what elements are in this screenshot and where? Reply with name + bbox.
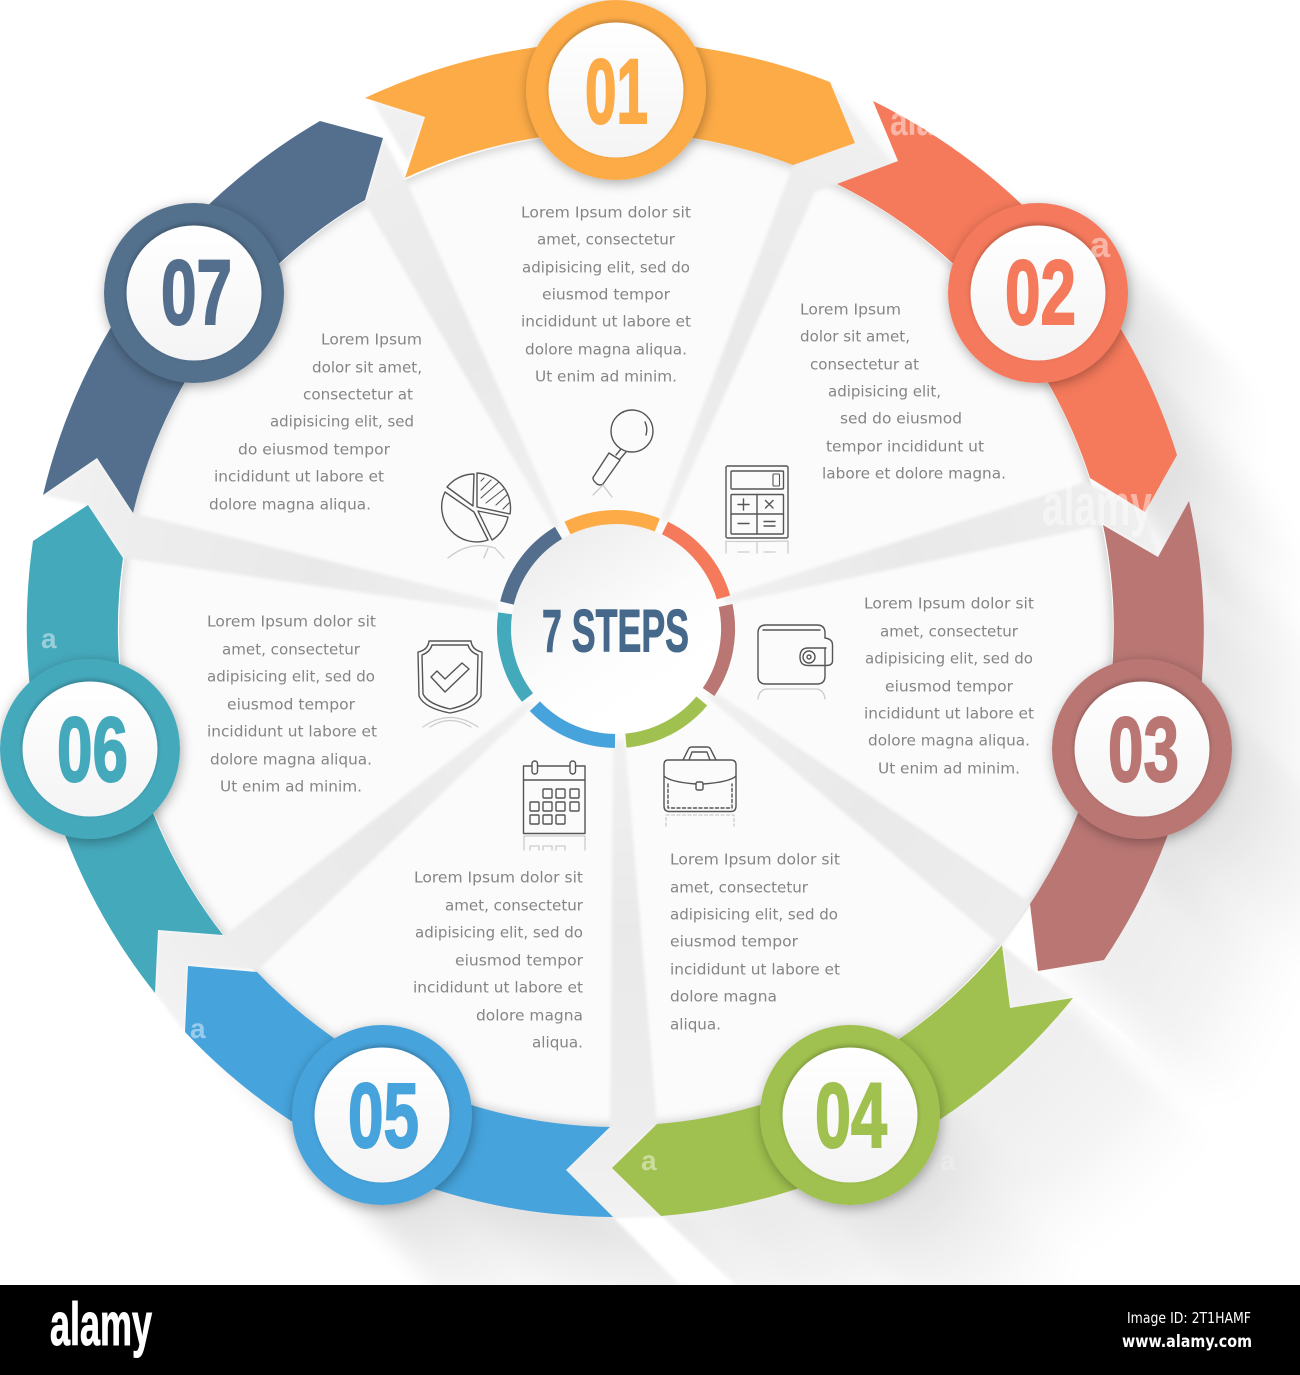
- text block 04: Lorem Ipsum dolor sit: [670, 850, 840, 868]
- badge 04: [760, 1025, 940, 1205]
- text block 06: eiusmod tempor: [227, 696, 356, 714]
- text block 07: Lorem Ipsum: [321, 330, 422, 348]
- text block 02: consectetur at: [810, 356, 919, 374]
- footer image id: Image ID: 2T1HAMF: [1127, 1309, 1251, 1327]
- badge 06: 06: [57, 699, 128, 801]
- text block 03: dolore magna aliqua.: [868, 732, 1030, 750]
- text block 01: incididunt ut labore et: [521, 312, 691, 330]
- text block 02: dolor sit amet,: [800, 328, 910, 346]
- segment 03 band: [1030, 501, 1204, 971]
- badge 06: [0, 659, 180, 839]
- badge 05: 05: [348, 1065, 419, 1167]
- text block 02: sed do eiusmod: [840, 410, 962, 428]
- badge 03: 03: [1108, 699, 1179, 801]
- inner disc: [119, 133, 1113, 1127]
- segment 02 band: [837, 101, 1177, 512]
- text block 01: Lorem Ipsum dolor sit: [521, 204, 691, 222]
- text block 04: adipisicing elit, sed do: [670, 906, 838, 924]
- stock watermark marks: a: [1090, 224, 1111, 265]
- text block 05: amet, consectetur: [445, 896, 584, 914]
- text block 03: adipisicing elit, sed do: [865, 650, 1033, 668]
- badge 02: 02: [1005, 242, 1076, 344]
- badge 07: 07: [161, 242, 232, 344]
- stock watermark marks: alamy: [1042, 473, 1152, 538]
- stock watermark marks: ala: [890, 97, 934, 144]
- badge 02: [948, 203, 1128, 383]
- text block 01: dolore magna aliqua.: [525, 340, 687, 358]
- text block 04: amet, consectetur: [670, 878, 809, 896]
- text block 07: dolore magna aliqua.: [209, 496, 371, 514]
- white stripes through the long shadow: [613, 971, 1150, 1285]
- text block 06: amet, consectetur: [222, 640, 361, 658]
- text block 05: dolore magna: [476, 1006, 583, 1024]
- text block 03: Ut enim ad minim.: [878, 760, 1020, 778]
- text block 07: incididunt ut labore et: [214, 468, 384, 486]
- text block 05: adipisicing elit, sed do: [415, 924, 583, 942]
- text block 02: tempor incididunt ut: [826, 438, 984, 456]
- center ring segments: [504, 517, 728, 741]
- text block 02: Lorem Ipsum: [800, 300, 901, 318]
- icon: calendar: [524, 761, 585, 850]
- text block 01: eiusmod tempor: [542, 286, 671, 304]
- text block 05: [413, 868, 584, 1052]
- badge 05: [292, 1025, 472, 1205]
- stock watermark marks: a: [190, 1013, 206, 1044]
- badge 07: [104, 203, 284, 383]
- text block 07: consectetur at: [303, 386, 413, 404]
- badge 01: [526, 0, 706, 180]
- text block 03: amet, consectetur: [880, 622, 1019, 640]
- center title: 7 STEPS: [542, 598, 689, 664]
- center circle: [511, 524, 721, 734]
- segment 06 band: [27, 505, 223, 993]
- text block 05: Lorem Ipsum dolor sit: [414, 868, 583, 886]
- text block 01: adipisicing elit, sed do: [522, 258, 690, 276]
- segment 01 band: [365, 42, 855, 178]
- stock watermark marks: a: [940, 1145, 956, 1176]
- badge 03: [1052, 659, 1232, 839]
- segment 07 band: [43, 121, 383, 513]
- text block 03: eiusmod tempor: [885, 678, 1014, 696]
- segment 05 band: [185, 966, 613, 1217]
- stock watermark marks: a: [41, 623, 57, 654]
- text block 02: adipisicing elit,: [828, 382, 941, 400]
- badge 04: 04: [815, 1065, 887, 1167]
- icon: magnifying glass: [593, 410, 653, 497]
- gap shadows between the segments: [43, 82, 1158, 1217]
- icon: shield with check: [418, 641, 482, 727]
- text block 03: incididunt ut labore et: [864, 704, 1034, 722]
- text block 05: aliqua.: [532, 1034, 583, 1052]
- text block 04: dolore magna: [670, 988, 777, 1006]
- text block 04: incididunt ut labore et: [670, 960, 840, 978]
- stock watermark marks: [41, 97, 1152, 1176]
- text block 07: [209, 330, 422, 514]
- text block 01: amet, consectetur: [537, 230, 676, 248]
- text block 02: labore et dolore magna.: [822, 464, 1006, 482]
- text block 01: [521, 204, 691, 386]
- text block 06: Ut enim ad minim.: [220, 778, 362, 796]
- text block 04: eiusmod tempor: [670, 932, 799, 950]
- text block 01: Ut enim ad minim.: [535, 368, 677, 386]
- inner edge shadow of the ring on the disc: [117, 131, 1115, 1129]
- text block 06: Lorem Ipsum dolor sit: [207, 612, 376, 630]
- text block 05: eiusmod tempor: [455, 952, 584, 970]
- text block 06: [207, 612, 377, 796]
- icon: pie chart: [442, 473, 511, 558]
- footer bar: [0, 1285, 1300, 1375]
- icon: wallet: [758, 625, 832, 699]
- text block 05: incididunt ut labore et: [413, 978, 583, 996]
- text block 02: [800, 300, 1006, 482]
- segment 04 band: [612, 945, 1073, 1216]
- text block 07: dolor sit amet,: [312, 358, 422, 376]
- text block 07: do eiusmod tempor: [238, 440, 391, 458]
- text block 04: aliqua.: [670, 1016, 721, 1034]
- footer logo: alamy: [50, 1291, 152, 1358]
- badge 01: 01: [585, 41, 648, 143]
- text block 06: adipisicing elit, sed do: [207, 668, 375, 686]
- text block 03: Lorem Ipsum dolor sit: [864, 594, 1034, 612]
- text block 03: [864, 594, 1034, 778]
- icon: calculator: [726, 466, 788, 553]
- stock watermark marks: a: [641, 1145, 657, 1176]
- text block 06: incididunt ut labore et: [207, 722, 377, 740]
- icon: briefcase: [664, 747, 736, 826]
- text block 07: adipisicing elit, sed: [270, 412, 414, 430]
- text block 06: dolore magna aliqua.: [210, 750, 372, 768]
- footer site url: www.alamy.com: [1122, 1332, 1252, 1352]
- text block 04: [670, 850, 840, 1034]
